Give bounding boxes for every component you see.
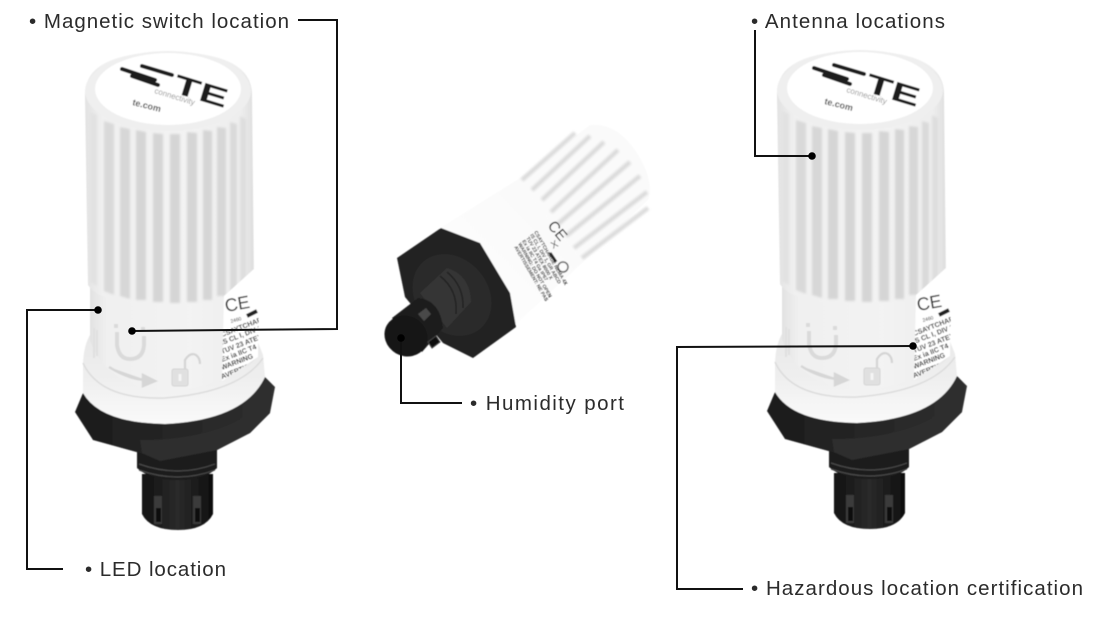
magnetic icon [116,324,144,359]
hex nut [75,377,275,461]
label text: • Hazardous location certification [751,577,1083,600]
label text: • Humidity port [470,392,624,415]
device: left sensor [75,51,275,530]
connector end face [377,308,435,364]
logo: TE [862,67,924,113]
certification label: CSAYTCHAR [912,316,955,338]
label text: • LED location [85,558,226,581]
label text: • Antenna locations [751,10,945,33]
dot [808,152,816,160]
certification label [914,268,952,380]
cap top [777,50,943,130]
certification label: Ex ia IIC T4 [220,344,258,364]
label text: • Magnetic switch location [29,10,289,33]
certification label: TUV 23 ATEX [912,333,956,355]
hex nut [767,376,967,460]
lower body [782,279,949,391]
certification label: CSAYTCHAR [220,317,263,339]
magnetic icon [808,323,836,358]
leader line [755,30,812,156]
certification label, middle device: AVERTISSEMENT: NE PAS [512,245,549,303]
hex nut [397,228,516,358]
band with label [440,180,583,325]
certification label, middle device: IS CL I, DIV 1, GR ABCD [528,233,562,285]
certification label, middle device: WARNING: DO NOT OPEN [516,242,553,299]
certification label, middle device [512,218,570,303]
certification label: IS CL I, DIV 1 [912,324,955,346]
certification label: CE [223,292,251,316]
certification label: WARNING [220,353,255,372]
certification label: TUV 23 ATEX [220,334,264,356]
certification label: AVERTISSEM [220,358,265,381]
logo: connectivity [845,85,888,106]
leader line [27,310,98,569]
ribbed body [517,125,650,262]
logo: te.com [824,96,854,113]
connector barrel [392,298,443,352]
LED window [94,328,97,358]
callout: hazardous certification [677,342,1083,600]
dot [128,327,136,335]
certification label: AVERTISSEM [912,357,957,380]
logo: te.com [132,97,162,114]
ribbed cap [85,52,254,305]
callout: magnetic switch [29,10,337,335]
dot [909,342,917,350]
certification label: 2460 [230,316,242,325]
connector [137,445,217,530]
lower body [90,280,257,392]
cap top [85,51,251,131]
lock icon [172,354,200,386]
logo: connectivity [153,86,196,107]
LED window [786,327,789,357]
certification label: Ex ia IIC T4 [912,343,950,363]
collar [775,334,957,423]
logo [122,66,232,114]
certification label, middle device: Ex ia IIC T4 Ga IP67 [520,239,549,282]
callout: antenna [751,10,945,160]
dot [397,334,405,342]
certification label, middle device: CSAYTCHARGE NEMA 4X [532,230,569,287]
connector [829,444,909,529]
device: right sensor [767,50,967,529]
certification label: CE [915,291,943,315]
logo [814,65,924,113]
callout: humidity port [397,334,624,415]
collar [83,335,265,424]
arrow icon [109,367,155,386]
leader line [677,346,913,589]
thread [420,268,471,328]
certification label, middle device: CE [544,218,570,245]
dot [94,306,102,314]
certification label, middle device: TUV 23 ATEX 8000 X [524,236,554,281]
leader line [401,338,462,403]
lock icon [864,353,892,385]
certification label: WARNING [912,352,947,371]
arrow icon [801,366,847,385]
ribbed cap [777,51,946,304]
certification label [222,270,260,380]
certification label, middle device: X [549,239,561,252]
logo: TE [170,68,232,114]
certification label: IS CL I, DIV 1 [220,325,263,347]
device: middle sensor, tilted [377,125,650,364]
leader line [132,20,337,331]
certification label: 2460 [922,315,934,324]
callout: LED [27,306,226,581]
